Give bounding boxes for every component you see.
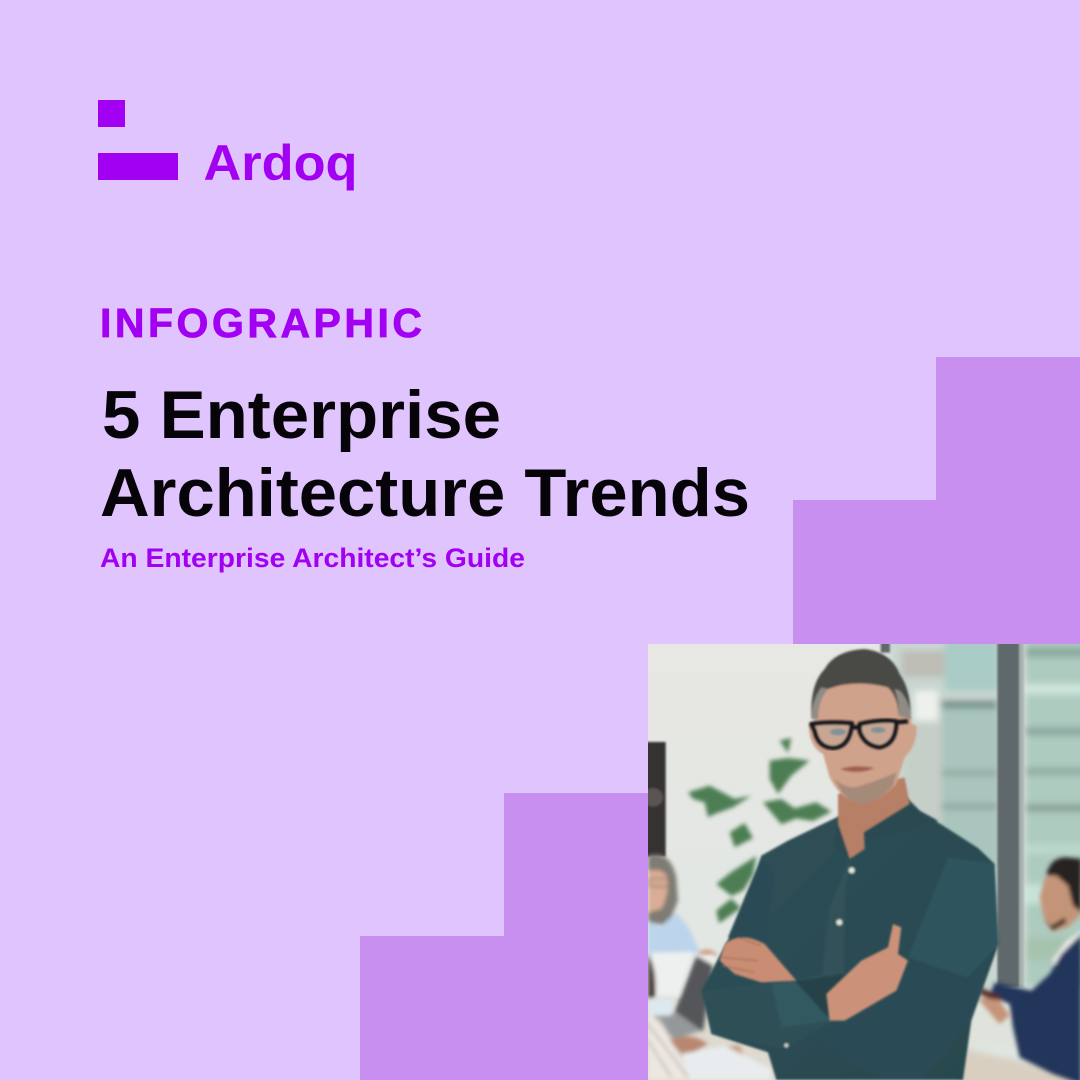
photo: architect with crossed arms in an office [648, 644, 1080, 1080]
plant [688, 738, 831, 923]
eyebrow label: INFOGRAPHIC [100, 300, 422, 346]
title: 5 Enterprise [102, 377, 501, 453]
neck and face [809, 649, 917, 859]
logo wordmark: Ardoq [204, 135, 358, 191]
decorative stepped shape: top right [793, 357, 1080, 644]
title [100, 377, 750, 531]
hands [720, 924, 908, 1021]
subtitle: An Enterprise Architect’s Guide [100, 543, 525, 573]
decorative stepped shape: bottom centre [360, 793, 648, 1080]
title: Architecture Trends [100, 455, 750, 531]
background colleague: man in suit [978, 857, 1080, 1080]
central man [701, 649, 999, 1080]
window frames [881, 641, 1024, 987]
icon: logo squares [98, 100, 178, 180]
glasses [811, 721, 908, 748]
table and laptop [648, 952, 771, 1080]
wall artwork [643, 742, 666, 857]
logo: Ardoq [98, 100, 358, 191]
office background [638, 634, 1080, 1080]
background colleague: woman [648, 854, 717, 959]
shirt [701, 797, 999, 1080]
